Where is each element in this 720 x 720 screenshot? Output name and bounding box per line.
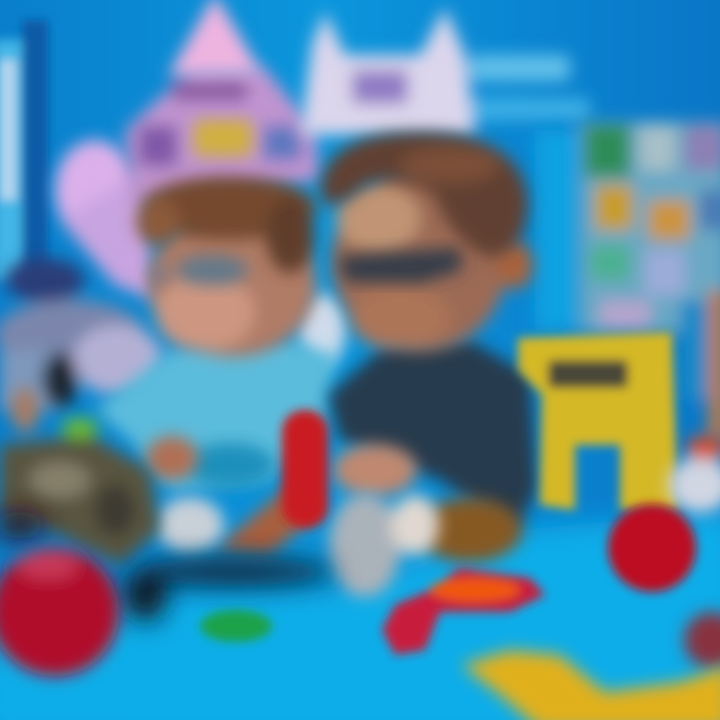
toy: small red ball bbox=[608, 504, 696, 592]
toy: camouflage vehicle bbox=[0, 388, 160, 565]
castle: pink tower peak bbox=[168, 0, 262, 76]
glow: pale area between children bbox=[298, 294, 346, 366]
child left: shirt bbox=[95, 340, 335, 490]
panel: right toy shelf bbox=[535, 122, 720, 440]
toy: maroon ball at right edge bbox=[684, 612, 720, 668]
child left: arm and hand bbox=[146, 436, 320, 555]
child right: glasses bbox=[338, 248, 462, 283]
toys: grey and purple clutter at left bbox=[0, 258, 163, 410]
child left bbox=[95, 176, 335, 555]
child left: white leg bbox=[156, 497, 224, 553]
castle: white towers bbox=[300, 8, 590, 135]
toy: green disc bbox=[200, 610, 272, 642]
child right: dark shirt bbox=[328, 340, 537, 530]
castle: pink and lilac toy castle bbox=[55, 0, 320, 300]
child left: eyes bbox=[152, 255, 248, 287]
toy: yellow banana bbox=[462, 650, 720, 720]
toy: red block bbox=[282, 410, 328, 528]
child left: head bbox=[148, 213, 316, 357]
toy: white and red stack at right edge bbox=[668, 436, 720, 513]
castle: main body bbox=[125, 68, 320, 205]
child right: hair bbox=[320, 132, 528, 258]
child right bbox=[320, 132, 537, 597]
castle: lilac left lobe bbox=[55, 140, 155, 300]
panel: left window bbox=[0, 20, 48, 290]
toy: large red ball bbox=[0, 548, 119, 676]
castle: yellow window bbox=[194, 120, 252, 156]
toy: orange and red shape bbox=[382, 568, 545, 655]
toy: yellow chair bbox=[518, 332, 678, 510]
child right: head bbox=[332, 168, 533, 352]
child left: shirt shade bbox=[185, 443, 275, 487]
shadow: dark strip under children bbox=[0, 511, 335, 621]
child right: hands and lap bbox=[333, 444, 522, 562]
child left: hair bbox=[136, 176, 316, 273]
floor: cyan play mat bbox=[0, 510, 720, 720]
child right: white socks bbox=[329, 493, 439, 597]
